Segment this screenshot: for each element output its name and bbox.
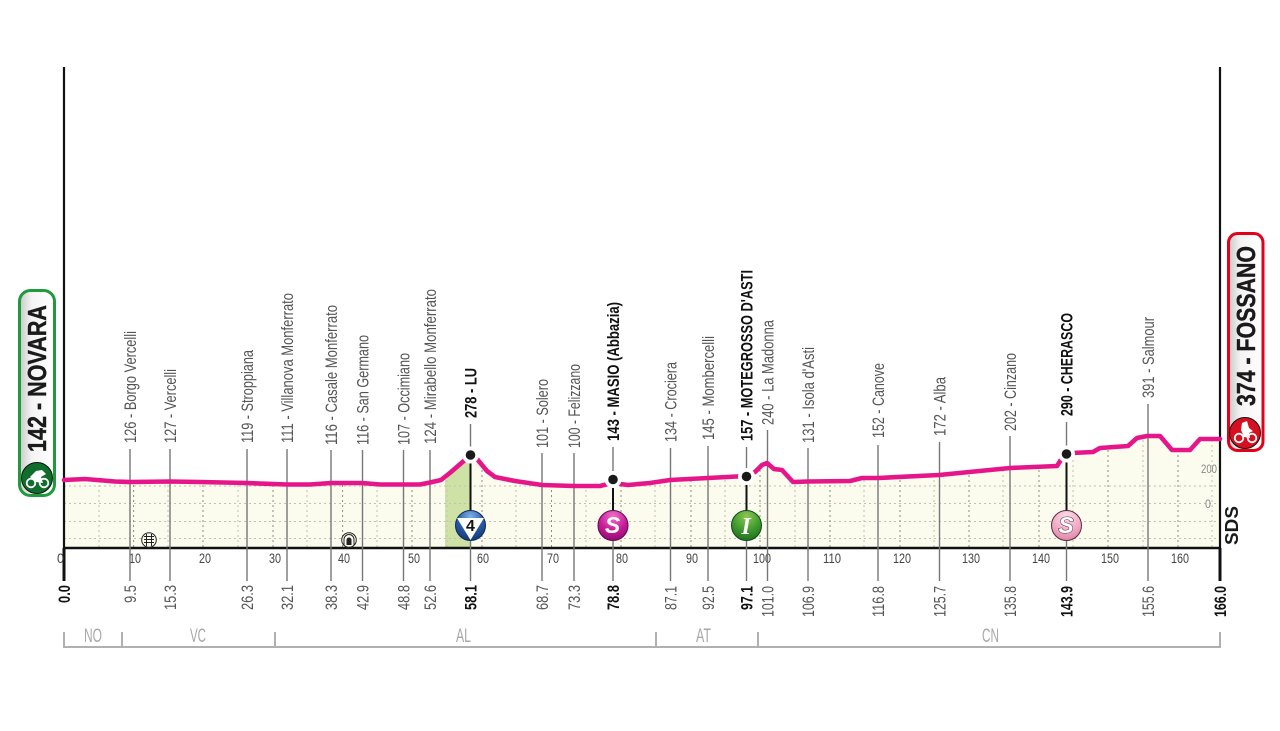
stop: MOTEGROSSO D'ASTI with intermediate [732, 270, 762, 610]
stop: Borgo Vercelli: 9.5 [121, 585, 140, 603]
stop: Alba: 172 - Alba [930, 377, 950, 436]
stop: Mombercelli: 92.5 [699, 586, 718, 610]
kilometre tick labels: 140 [1032, 550, 1050, 566]
stop: Felizzano: 100 - Felizzano [565, 364, 584, 448]
kilometre tick labels: 60 [477, 550, 489, 566]
stop: San Germano: 42.9 [354, 585, 372, 610]
stop: LU with category 4 climb: 4 [466, 518, 475, 535]
kilometre tick labels: 100 [753, 550, 771, 566]
stop: Canove: 152 - Canove [869, 363, 888, 438]
stop: Casale Monferrato [322, 305, 341, 610]
stop: MASIO with sprint [598, 302, 628, 610]
climb gradient highlight [445, 456, 470, 548]
stop: CHERASCO with sprint: 143.9 [1058, 586, 1076, 617]
stop: LU with category 4 climb [456, 368, 486, 610]
stop: Vercelli: 127 - Vercelli [161, 369, 180, 443]
province bracket: VC [190, 626, 206, 647]
stop: LU with category 4 climb: 58.1 [462, 585, 480, 610]
stop: Villanova Monferrato: 32.1 [278, 585, 297, 610]
stop: Crociera: 87.1 [662, 586, 680, 610]
stop: MOTEGROSSO D'ASTI with intermediate: 97.1 [738, 586, 756, 610]
kilometre tick labels: 50 [408, 550, 420, 566]
stop: Felizzano [565, 364, 584, 610]
stop: CHERASCO with sprint [1052, 313, 1082, 617]
finish badge: Fossano [1228, 234, 1263, 450]
stop: San Germano [354, 335, 372, 610]
stop: Alba [930, 377, 950, 617]
stop: CHERASCO with sprint: S [1058, 512, 1074, 538]
stop: Canove: 116.8 [869, 586, 888, 617]
SDS logo: SDS [1222, 506, 1242, 545]
stop: MASIO with sprint: S [605, 512, 621, 538]
stop: Mombercelli: 145 - Mombercelli [699, 336, 718, 440]
province bracket: AL [456, 626, 471, 647]
kilometre tick labels: 70 [547, 550, 559, 566]
icon: tunnel [342, 533, 356, 547]
kilometre tick labels: 80 [616, 550, 628, 566]
kilometre tick labels: 30 [269, 550, 281, 566]
stop: Stroppiana: 26.3 [238, 585, 257, 610]
stop: Isola d'Asti [799, 347, 818, 617]
stop: Borgo Vercelli [121, 331, 140, 603]
icon: level crossing [142, 533, 156, 547]
elevation profile line [64, 436, 1220, 486]
stop: Mombercelli [699, 336, 718, 610]
stop: MASIO with sprint: 143 - MASIO (Abbazia) [604, 302, 623, 441]
scale labels: 0 [1205, 497, 1211, 511]
final kilometre: 0.0: 0.0 [55, 585, 74, 603]
stop: Solero: 101 - Solero [533, 379, 552, 448]
stop: Solero: 68.7 [533, 585, 552, 610]
stop: Alba: 125.7 [930, 586, 950, 617]
stop: LU with category 4 climb: 278 - LU [462, 368, 480, 418]
stop: Occimiano: 48.8 [394, 585, 414, 610]
kilometre tick labels: 0 [57, 550, 64, 566]
kilometre tick labels: 20 [199, 550, 211, 566]
stop: Cinzano: 135.8 [1001, 586, 1020, 617]
kilometre tick labels: 130 [962, 550, 980, 566]
stop: Isola d'Asti: 106.9 [799, 586, 818, 617]
final kilometre: 166.0: 166.0 [1211, 586, 1230, 617]
kilometre tick labels: 160 [1171, 550, 1189, 566]
stop: La Madonna: 101.0 [758, 586, 778, 617]
stop: Mirabello Monferrato: 52.6 [421, 585, 440, 610]
start badge: Novara: 142 - NOVARA [22, 305, 52, 452]
kilometre tick labels: 120 [893, 550, 911, 566]
stop: Casale Monferrato: 38.3 [322, 585, 341, 610]
stop: Crociera: 134 - Crociera [662, 362, 680, 442]
stop: Mirabello Monferrato [421, 289, 440, 610]
stop: Felizzano: 73.3 [565, 585, 584, 610]
stop: Casale Monferrato: 116 - Casale Monferrato [322, 305, 341, 445]
kilometre tick labels: 10 [129, 550, 141, 566]
axes [63, 67, 1221, 581]
stop: San Germano: 116 - San Germano [354, 335, 372, 445]
scale labels [1201, 462, 1217, 511]
stop: Crociera [662, 362, 680, 610]
stop: CHERASCO with sprint: 290 - CHERASCO [1058, 313, 1076, 416]
stop: Stroppiana: 119 - Stroppiana [238, 350, 257, 443]
stop: Isola d'Asti: 131 - Isola d'Asti [799, 347, 818, 443]
stop: Borgo Vercelli: 126 - Borgo Vercelli [121, 331, 140, 443]
stop: Salmour: 155.6 [1139, 586, 1158, 617]
stop: Vercelli: 15.3 [161, 585, 180, 610]
stop: Canove [869, 363, 888, 617]
stop: Cinzano: 202 - Cinzano [1001, 353, 1020, 431]
stop: La Madonna [758, 320, 778, 617]
stop: La Madonna: 240 - La Madonna [758, 320, 778, 425]
kilometre tick labels [57, 550, 1189, 566]
stop: Salmour: 391 - Salmour [1139, 317, 1158, 398]
finish badge: Fossano: 374 - FOSSANO [1231, 246, 1261, 406]
kilometre tick labels: 110 [823, 550, 841, 566]
province bracket: NO [84, 626, 102, 647]
stop: Mirabello Monferrato: 124 - Mirabello Monferrato [421, 289, 440, 444]
stop: Cinzano [1001, 353, 1020, 617]
scale labels: 200 [1201, 462, 1217, 476]
stop: Villanova Monferrato [278, 293, 297, 610]
kilometre tick labels: 150 [1101, 550, 1119, 566]
stop: Salmour [1139, 317, 1158, 617]
province bracket [64, 626, 1220, 647]
stop: Stroppiana [238, 350, 257, 610]
start badge: Novara [20, 290, 54, 496]
icon: start cyclist [22, 462, 52, 494]
stop: MASIO with sprint: 78.8 [604, 585, 623, 610]
stop: Occimiano: 107 - Occimiano [394, 353, 414, 445]
stop: Vercelli [161, 369, 180, 610]
stop: Occimiano [394, 353, 414, 610]
province bracket: AT [696, 626, 711, 647]
stop: MOTEGROSSO D'ASTI with intermediate: I [740, 514, 752, 540]
province bracket: CN [982, 626, 999, 647]
stop: Solero [533, 379, 552, 610]
elevation area fill [64, 436, 1220, 548]
kilometre tick labels: 40 [338, 550, 350, 566]
stop: MOTEGROSSO D'ASTI with intermediate: 157 - MOTEGROSSO D'ASTI [738, 270, 756, 441]
stop: Villanova Monferrato: 111 - Villanova Monferrato [278, 293, 297, 443]
kilometre tick labels: 90 [686, 550, 698, 566]
icon: finish cyclist [1230, 418, 1260, 448]
